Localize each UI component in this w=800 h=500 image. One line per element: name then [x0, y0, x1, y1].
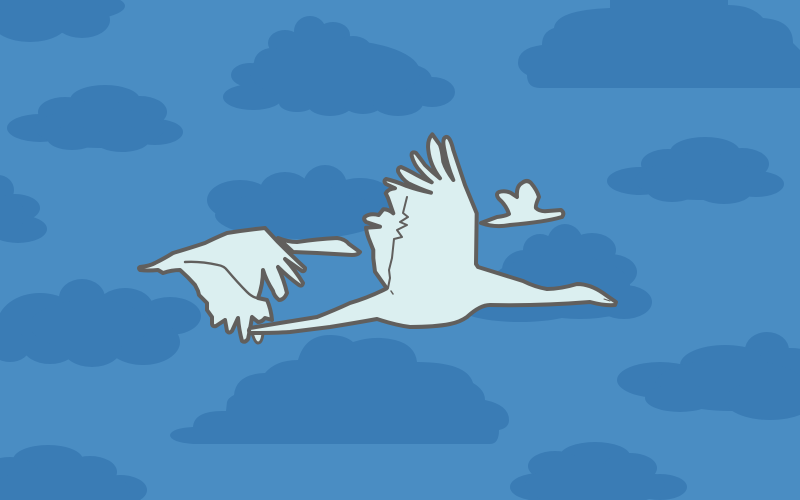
swan: distant wing fragment: [481, 181, 563, 226]
cloud: upper left: [7, 85, 183, 152]
swan: rear swan neck: [278, 238, 360, 255]
front swan wing lines: [388, 197, 408, 288]
cloud: bottom right: [510, 442, 687, 500]
cloud: bottom left: [0, 445, 147, 500]
cloud: bottom centre: [170, 335, 509, 444]
front swan feather tick: [391, 291, 393, 294]
cloud: top centre: [223, 16, 455, 116]
cloud: left lower: [0, 279, 201, 367]
front swan body, wing and neck: [249, 134, 616, 333]
cloud: below right swan: [460, 224, 652, 322]
cloud: right middle: [607, 137, 784, 204]
cloud: behind the swans: [207, 165, 395, 239]
swans layer: [139, 134, 616, 343]
rear swan body and wing: [139, 228, 305, 342]
rear swan wing line: [185, 262, 257, 298]
cloud: top left: [0, 0, 125, 42]
cloud: top right: [518, 0, 800, 88]
front swan eye detail: [604, 299, 610, 301]
cloud: right lower: [617, 332, 800, 420]
swan: front swan: [249, 134, 616, 333]
swan: rear swan: [139, 228, 305, 343]
rear swan foot: [252, 333, 263, 343]
cloud: left edge: [0, 175, 47, 243]
